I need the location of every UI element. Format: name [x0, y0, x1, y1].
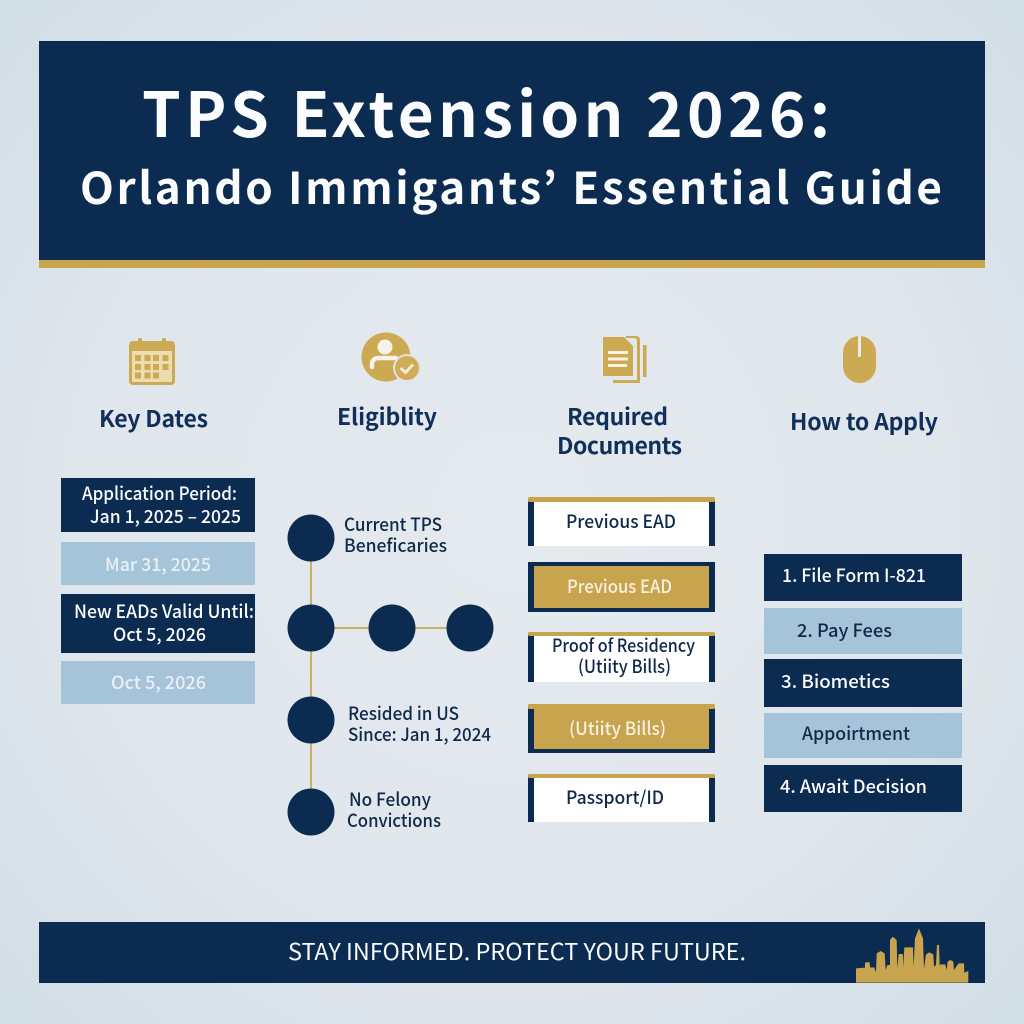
column: eligibility [288, 332, 494, 836]
title line 2: Orlando Immigants’ Essential Guide [80, 153, 942, 217]
node: current TPS beneficiaries: Current TPS [344, 511, 442, 537]
node: resided in US: Since: Jan 1, 2024 [348, 721, 491, 747]
box: october date [61, 661, 255, 704]
step 3: 3. Biometics [781, 668, 890, 694]
title line 1: TPS Extension 2026: [142, 65, 830, 155]
box: application period [61, 478, 255, 532]
box: application period: Application Period: [82, 480, 237, 506]
icon: documents [603, 336, 646, 383]
card: passport/ID [528, 774, 715, 822]
box: march date [61, 542, 255, 585]
step 3 continued [764, 713, 962, 758]
node: resided in US [288, 696, 491, 747]
heading: eligibility: Eligiblity [337, 398, 437, 432]
box: application period: Jan 1, 2025 – 2025 [90, 503, 241, 529]
step 4: 4. Await Decision [780, 773, 927, 799]
step 2: 2. Pay Fees [797, 617, 892, 643]
card: utility bills gold [528, 704, 715, 753]
box: new EADs valid until: New EADs Valid Until: [74, 598, 254, 624]
node: no felony convictions: Convictions [347, 807, 441, 833]
heading: required documents: Documents [557, 427, 682, 461]
card: proof of residency: Proof of Residency [552, 632, 695, 658]
card: previous EAD gold: Previous EAD [567, 573, 672, 599]
card: previous EAD gold [528, 562, 715, 612]
icon: mouse [843, 335, 876, 383]
card: utility bills gold: (Utiity Bills) [569, 715, 666, 741]
node: no felony convictions [288, 786, 441, 836]
box: march date: Mar 31, 2025 [105, 551, 211, 577]
card: passport/ID: Passport/ID [566, 784, 664, 810]
card: previous EAD [528, 497, 715, 546]
card: proof of residency: (Utiity Bills) [578, 653, 671, 679]
column: required documents [528, 336, 715, 822]
node: current TPS beneficiaries: Beneficaries [344, 532, 447, 558]
card: proof of residency [528, 632, 715, 682]
step 2 [764, 608, 962, 654]
footer tagline: STAY INFORMED. PROTECT YOUR FUTURE. [288, 933, 746, 967]
icon: person with check [362, 332, 421, 382]
icon: calendar [129, 338, 175, 385]
box: new EADs valid until: Oct 5, 2026 [113, 621, 206, 647]
heading: required documents: Required [567, 398, 668, 432]
step 3 [764, 659, 962, 707]
card: previous EAD: Previous EAD [566, 508, 676, 534]
step 4 [764, 765, 962, 812]
box: october date: Oct 5, 2026 [111, 669, 206, 695]
heading: required documents [557, 398, 682, 461]
node: no felony convictions: No Felony [349, 786, 431, 812]
footer banner [39, 922, 985, 983]
step 1: 1. File Form I-821 [782, 562, 926, 588]
connector lines [310, 555, 450, 805]
column: how to apply [764, 335, 962, 812]
nodes: middle row [288, 604, 494, 652]
step 3 continued: Appoirtment [802, 720, 910, 746]
box: new EADs valid until [61, 594, 255, 653]
icon: city skyline [856, 928, 968, 983]
heading: key dates: Key Dates [99, 400, 208, 434]
column: key dates [61, 338, 255, 704]
header banner [39, 41, 985, 268]
step 1 [764, 554, 962, 601]
heading: how to apply: How to Apply [790, 403, 938, 437]
node: resided in US: Resided in US [348, 700, 459, 726]
node: current TPS beneficiaries [288, 511, 447, 562]
